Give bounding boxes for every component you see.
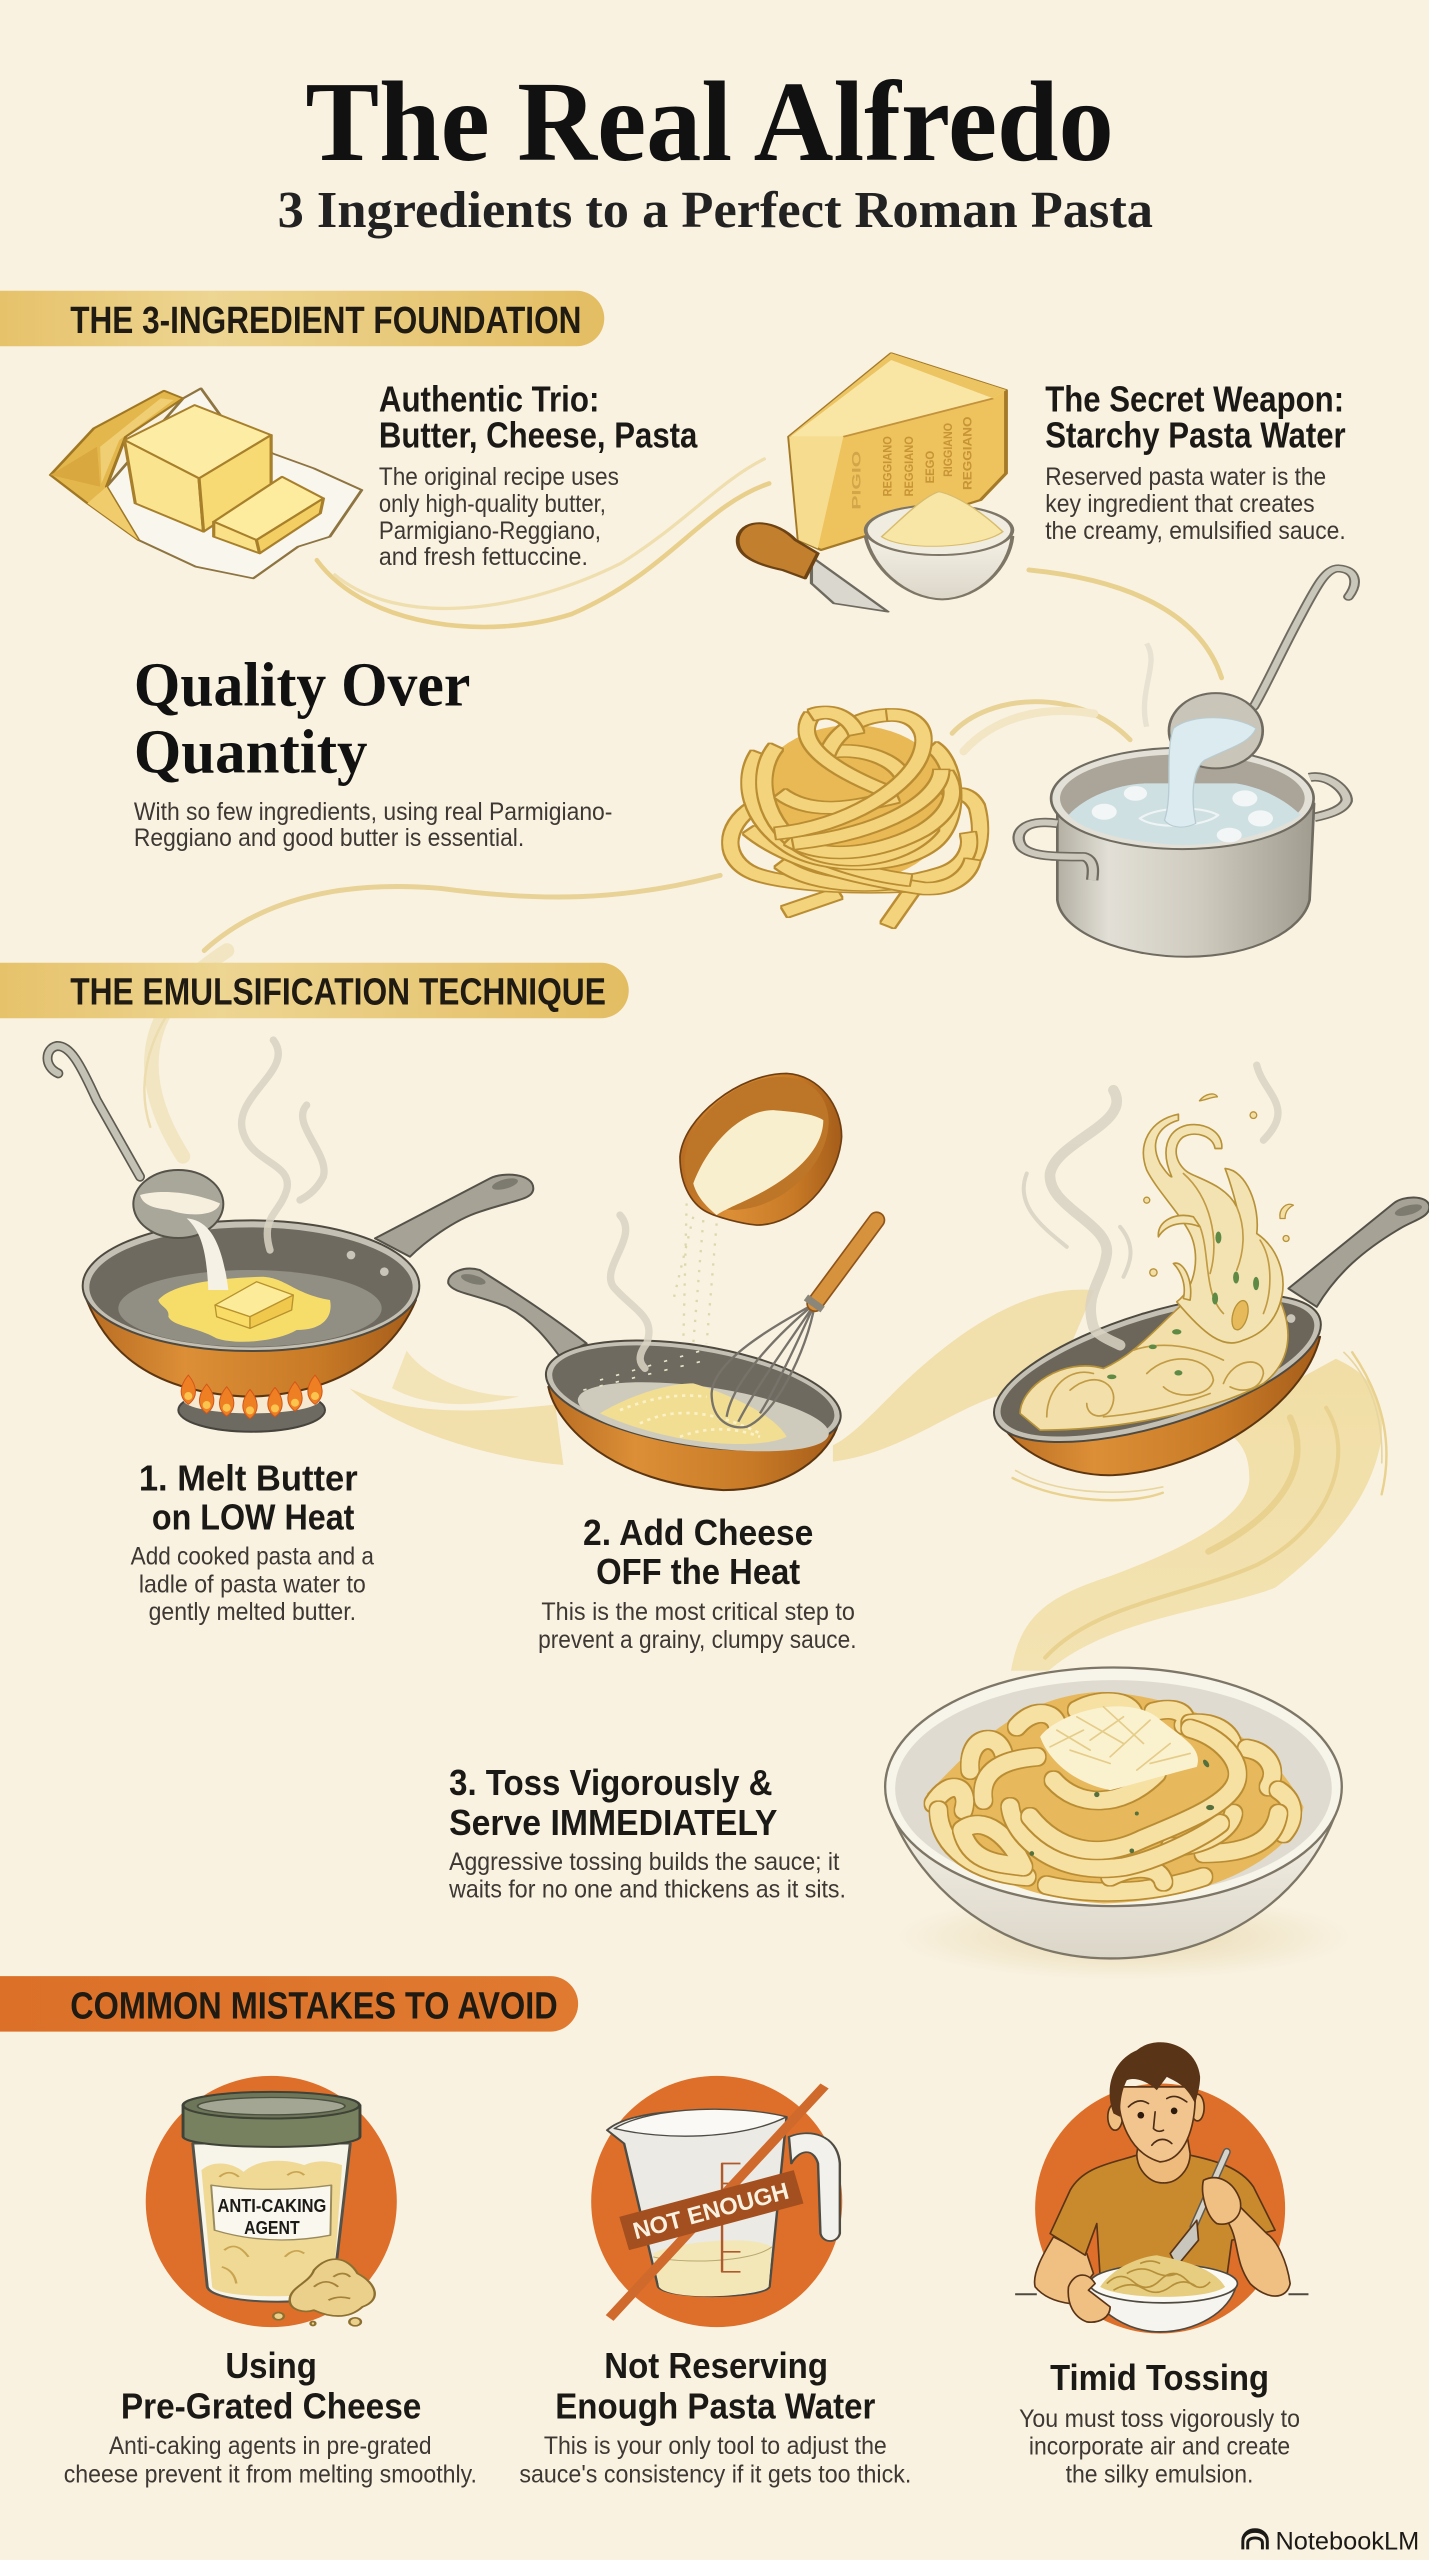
text: mistake 3: the silky emulsion. (1066, 2460, 1253, 2488)
text: mistake 1: cheese prevent it from melting smoothly. (64, 2460, 477, 2488)
section banner: technique (0, 963, 629, 1018)
text: step 2: prevent a grainy, clumpy sauce. (538, 1626, 857, 1654)
icon: pan tossing pasta (978, 1065, 1429, 1492)
icon: parmesan wedge, bowl and knife: PIGIO (850, 451, 864, 510)
text: secret weapon: the creamy, emulsified sauce. (1045, 517, 1346, 545)
text: secret weapon: Reserved pasta water is the (1045, 463, 1326, 491)
text: secret weapon: key ingredient that creates (1045, 490, 1315, 518)
icon: parmesan wedge, bowl and knife (738, 353, 1012, 612)
text: step 2: 2. Add Cheese (583, 1512, 813, 1553)
text: step 3 (448, 1762, 846, 1904)
flow ribbons between pans (349, 1290, 1386, 1671)
text: step 2: This is the most critical step to (541, 1598, 855, 1626)
text: mistake 2 (519, 2345, 911, 2488)
text: authentic trio: only high-quality butter, (379, 490, 606, 518)
section banner: mistakes (0, 1976, 578, 2032)
section banner: mistakes: COMMON MISTAKES TO AVOID (70, 1985, 558, 2027)
icon: parmesan wedge, bowl and knife: REGGIANO (902, 436, 916, 496)
text: secret weapon (1045, 379, 1346, 545)
icon: pan with butter on burner (48, 1030, 533, 1432)
icon: measuring jug with not enough water (591, 2076, 842, 2327)
text: quality over quantity: Quantity (134, 719, 367, 787)
text: step 2: OFF the Heat (596, 1551, 800, 1592)
icon: finished bowl of alfredo (885, 1667, 1353, 1980)
icon: jar of pre-grated cheese: AGENT (244, 2217, 300, 2238)
icon: butter (50, 388, 362, 578)
icon: parmesan wedge, bowl and knife: REGGIANO (961, 416, 975, 490)
text: mistake 2: Not Reserving (604, 2345, 828, 2386)
text: step 2 (538, 1512, 857, 1654)
subtitle: 3 Ingredients to a Perfect Roman Pasta (278, 181, 1153, 239)
text: step 3: Aggressive tossing builds the sauce; it (449, 1848, 839, 1876)
text: secret weapon: The Secret Weapon: (1045, 379, 1344, 420)
text: step 3: 3. Toss Vigorously & (449, 1762, 772, 1803)
icon: parmesan wedge, bowl and knife: RIGGIANO (941, 423, 955, 477)
text: mistake 1: Using (225, 2345, 317, 2386)
text: quality over quantity: Quality Over (134, 652, 470, 720)
text: step 1: on LOW Heat (152, 1496, 354, 1537)
text: mistake 1 (64, 2345, 477, 2488)
text: step 1 (131, 1457, 375, 1626)
icon: parmesan wedge, bowl and knife: REGGIANO (881, 436, 895, 496)
text: mistake 2: sauce's consistency if it gets too thick. (519, 2460, 911, 2488)
flow ribbons: upper section (144, 459, 1222, 1156)
section banner: foundation: THE 3-INGREDIENT FOUNDATION (70, 299, 581, 341)
text: mistake 3: Timid Tossing (1050, 2357, 1269, 2398)
icon: pan with cheese and whisk (448, 1215, 877, 1490)
text: mistake 1: Pre-Grated Cheese (121, 2386, 421, 2427)
text: authentic trio: Parmigiano-Reggiano, (379, 517, 601, 545)
text: mistake 2: Enough Pasta Water (555, 2386, 875, 2427)
logo: NotebookLM: NotebookLM (1275, 2527, 1419, 2555)
text: authentic trio: The original recipe uses (379, 463, 619, 491)
text: quality over quantity: With so few ingredients, using real Parmigiano- (134, 798, 612, 826)
icon: pot with ladle of pasta water (1019, 568, 1355, 957)
text: step 1: ladle of pasta water to (139, 1570, 366, 1598)
section banner: technique: THE EMULSIFICATION TECHNIQUE (70, 970, 606, 1012)
icon: pasta nest (730, 713, 980, 925)
icon: jar of pre-grated cheese: ANTI-CAKING (217, 2195, 326, 2216)
text: secret weapon: Starchy Pasta Water (1045, 415, 1346, 456)
icon: parmesan wedge, bowl and knife: EEGO (923, 451, 937, 483)
text: quality over quantity: Reggiano and good butter is essential. (134, 824, 524, 852)
text: mistake 3: You must toss vigorously to (1019, 2405, 1300, 2433)
icon: jar of pre-grated cheese (146, 2076, 397, 2327)
text: authentic trio: Authentic Trio: (379, 379, 599, 420)
text: mistake 3: incorporate air and create (1029, 2433, 1290, 2461)
text: authentic trio: Butter, Cheese, Pasta (379, 415, 698, 456)
icon: timid eater (1015, 2042, 1308, 2334)
icon: measuring jug with not enough water: NOT ENOUGH (630, 2179, 792, 2245)
text: mistake 1: Anti-caking agents in pre-grated (109, 2432, 432, 2460)
icon: copper bowl of cheese (659, 1050, 855, 1343)
text: step 3: Serve IMMEDIATELY (449, 1802, 777, 1843)
text: step 1: Add cooked pasta and a (131, 1543, 375, 1571)
text: step 1: gently melted butter. (149, 1598, 356, 1626)
text: step 3: waits for no one and thickens as it sits. (448, 1876, 846, 1904)
text: quality over quantity (134, 652, 612, 852)
text: step 1: 1. Melt Butter (139, 1457, 358, 1498)
text: mistake 3 (1019, 2357, 1300, 2488)
text: authentic trio (379, 379, 698, 571)
title: The Real Alfredo (305, 58, 1114, 185)
text: mistake 2: This is your only tool to adjust the (544, 2432, 887, 2460)
text: authentic trio: and fresh fettuccine. (379, 543, 588, 571)
section banner: foundation (0, 291, 604, 346)
